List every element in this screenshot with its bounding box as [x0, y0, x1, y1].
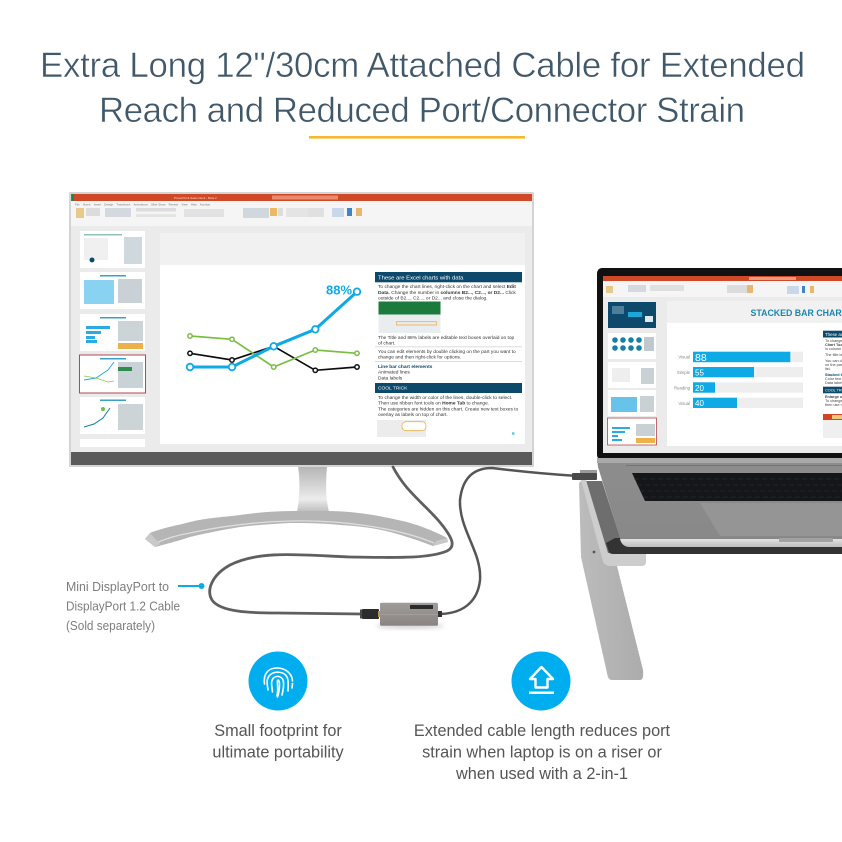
monitor cable: [210, 467, 452, 614]
slide notes panel: overlay as labels on top of chart.: [378, 412, 448, 418]
monitor screen: presentation app: [71, 194, 532, 452]
slide notes panel: [375, 272, 522, 437]
laptop slide notes: in column: [825, 347, 841, 351]
laptop lid: [597, 268, 842, 460]
bar chart: 20: [695, 384, 704, 393]
laptop thumbnail pane: [608, 302, 656, 445]
feature text: small footprint: ultimate portability: [212, 744, 344, 762]
bar chart: Visual: [678, 354, 690, 360]
line chart: [187, 282, 360, 372]
laptop cable: [441, 468, 578, 614]
laptop slide: [667, 301, 842, 446]
monitor bottom bezel: [71, 452, 532, 465]
slide notes panel: The categories are hidden on this chart. Create new text boxes to: [378, 406, 519, 412]
slide notes panel: You can edit elements by double clicking on the part you want to: [378, 349, 516, 355]
slide notes panel: Animated lines: [378, 370, 410, 376]
slide notes panel: of chart.: [378, 341, 396, 347]
feature text: extended cable length: when used with a 2-in-1: [455, 765, 628, 783]
slide notes panel: Then use ribbon font tools on Home Tab to change.: [378, 401, 489, 407]
stand leg: [579, 480, 643, 680]
slide notes panel: Line bar chart elements: [378, 364, 433, 370]
laptop slide notes: Color text: [825, 377, 842, 381]
feature text: extended cable length: strain when laptop is on a riser or: [422, 744, 662, 762]
laptop slide notes: list.: [825, 367, 831, 371]
feature text: extended cable length: [414, 722, 671, 783]
slide notes panel: These are Excel charts with data: [378, 276, 464, 282]
monitor: [69, 192, 534, 467]
USB-C plug at laptop: [572, 473, 597, 480]
icon: upload arrow: [512, 652, 570, 710]
bar chart: Visual: [678, 401, 690, 406]
callout: cable label: Mini DisplayPort to: [66, 579, 169, 594]
bar chart: Simple: [677, 370, 691, 375]
bar chart: 88: [695, 352, 707, 364]
slide notes panel: Data. Change the number in columns B2..., C2..., or D2... Click: [378, 290, 516, 296]
bar chart: Reading: [674, 386, 691, 390]
slide: [160, 233, 525, 444]
bar chart: 40: [695, 399, 704, 408]
riser plate under laptop: [606, 538, 842, 554]
line chart: 88%: [326, 282, 352, 298]
keyboard: [632, 473, 842, 501]
title: [40, 46, 805, 130]
title: Extra Long 12"/30cm Attached Cable for Extended: [40, 46, 805, 85]
feature text: small footprint: [212, 722, 344, 762]
adapter: [360, 603, 444, 628]
monitor screen: presentation app: PowerPoint Sales Deck - Beta 2: [174, 196, 217, 200]
feature text: extended cable length: Extended cable length reduces port: [414, 722, 671, 740]
icon: fingerprint: [248, 652, 308, 710]
slide notes panel: outside of B2..., C2..., or D2... and close the dialog.: [378, 296, 488, 302]
title: Reach and Reduced Port/Connector Strain: [99, 91, 745, 130]
slide notes panel: To change the width or color of the lines, double-click to select.: [378, 395, 512, 401]
laptop base: [597, 458, 842, 547]
title underline accent: [309, 136, 525, 139]
stand plate edge: [581, 480, 646, 566]
callout: cable label: [66, 579, 204, 633]
monitor screen: presentation app: File Home Insert Design Transitions Animations Slide Show Review View Help Acrobat: [75, 202, 210, 206]
slide notes panel: The Title and 88% labels are editable text boxes overlaid on top: [378, 335, 515, 341]
stand side face: [586, 481, 626, 556]
bar chart: 55: [695, 368, 704, 378]
slide notes panel: COOL TRICK: [378, 386, 408, 392]
bar chart: [674, 352, 803, 408]
laptop: [597, 268, 842, 554]
callout: cable label: DisplayPort 1.2 Cable: [66, 598, 180, 614]
slide notes panel: 6: [512, 431, 515, 437]
laptop screen: [603, 276, 842, 453]
laptop front edge: [620, 539, 842, 547]
slide notes panel: change and then right-click for options.: [378, 355, 461, 361]
laptop slide notes: [823, 331, 842, 438]
slide notes panel: Data labels: [378, 375, 403, 381]
thumbnail pane: [80, 231, 146, 447]
callout: cable label: (Sold separately): [66, 618, 155, 633]
slide notes panel: To change the chart lines, right-click on the chart and select Edit: [378, 284, 516, 290]
trackpad: [700, 503, 842, 536]
monitor stand: [145, 466, 448, 547]
feature text: small footprint: Small footprint for: [214, 722, 342, 740]
laptop stand: [579, 470, 646, 680]
